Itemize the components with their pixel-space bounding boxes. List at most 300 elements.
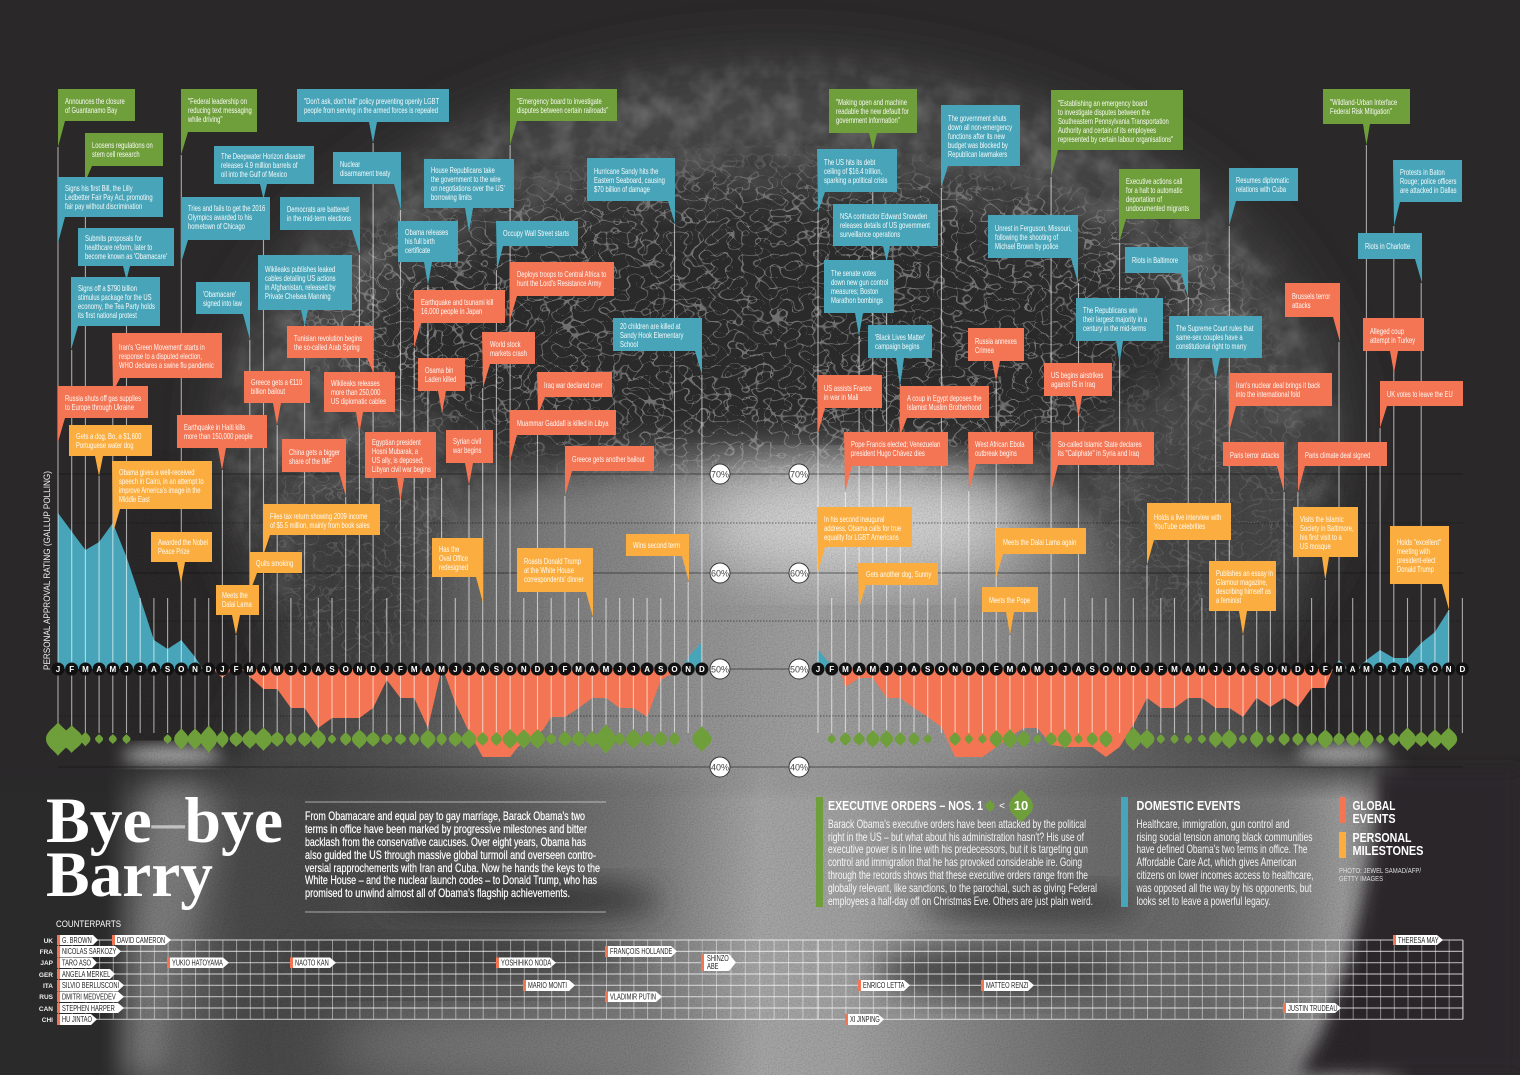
callout: Ferguson [988,215,1078,283]
leader tags: G. BROWN [62,937,92,945]
callout: mid-term elections: Democrats are battered [287,204,349,214]
callout: stock markets [482,332,535,388]
leader tags: SILVIO BERLUSCONI [62,982,119,990]
callout: Brexit [1380,381,1463,428]
callout: Iran deal: into the international fold [1236,389,1300,399]
callout: Bo the dog [69,425,152,476]
callout: don't ask don't tell: people from serving in the armed forces is repealed [304,105,438,115]
callout: government shutdown: down all non-emergency [948,122,1012,132]
callout: Emergency board railroads [510,89,617,145]
intro text: versial rapprochements with Iran and Cuba. Now he hands the keys to the [305,861,600,875]
callout: same-sex marriage: constitutional right to marry [1176,341,1247,351]
callout: stem-cell [85,133,163,182]
callout: mid-term elections: in the mid-term elections [287,213,351,223]
callout: Cairo speech: speech in Cairo, in an attempt to [119,476,204,486]
callout: Japan tsunami [414,290,505,348]
callout: Wildland: "Wildland-Urban Interface [1330,97,1397,107]
callout: debt ceiling [817,149,897,212]
callout: Pope Francis: Pope Francis elected; Venezuelan [851,439,940,449]
callouts: second term [817,89,1463,635]
callout: Guantanamo [58,89,135,147]
photo credit [1339,868,1421,883]
callout: Occupy Wall Street: Occupy Wall Street starts [503,228,569,238]
callout: Greece bailout: Greece gets a €110 [251,377,302,387]
month markers [56,665,1466,674]
callout: debt ceiling: The US hits its debt [824,157,875,167]
callout: birth certificate [398,221,458,285]
callout: Osama bin Laden: Osama bin [425,365,453,375]
country labels: CHI [42,1017,53,1024]
callout: Wikileaks logs: Wikileaks publishes leaked [265,264,335,274]
callout: Glamour essay: a feminist [1216,595,1241,605]
panel: domestic events: looks set to leave a powerful legacy. [1136,894,1270,908]
callout: Haiti earthquake: more than 150,000 people [184,431,253,441]
panel: executive orders: through the records shows that these executive orders range from the [828,868,1088,882]
callout: Osama bin Laden: Laden killed [425,374,456,384]
callout: Obamacare signed [196,282,250,340]
callout: Cuba: Resumes diplomatic [1236,175,1289,185]
panel: domestic events: have defined Obama's two terms in office. The [1136,842,1308,856]
callout: Republican majority: century in the mid-terms [1083,323,1146,333]
callout: nuclear treaty [333,152,401,210]
callout: debt ceiling: sparking a political crisis [824,175,888,185]
callout: Wikileaks logs: Private Chelsea Manning [265,291,331,301]
callout: Oval Office [432,538,483,603]
callout: Ferguson: Unrest in Ferguson, Missouri, [995,223,1072,233]
leader tags: ABE [707,963,719,971]
callout: Green Movement [112,333,222,392]
callout: Wildland [1323,89,1410,145]
callout: Cairo speech: Obama gives a well-received [119,467,194,477]
callout: Guantanamo: of Guantanamo Bay [65,105,118,115]
percentage scale badges: 40% [790,762,808,772]
callout: executive actions: Executive actions call [1126,176,1182,186]
callout: Charlotte: Riots in Charlotte [1365,241,1410,251]
callout: Glamour essay: describing himself as [1216,586,1271,596]
callout: Republican majority: The Republicans win [1083,305,1138,315]
callout: China IMF: China gets a bigger [289,447,340,457]
callout: mosque visit: US mosque [1300,541,1331,551]
callout: emergency board SEPTA: represented by certain labour organisations" [1058,134,1174,144]
legend: event colours: GLOBAL [1352,798,1396,813]
callout: Mubarak deposed: US ally, is deposed; [372,455,424,465]
callout: gun control: Marathon bombings [831,295,883,305]
panel: domestic events: Healthcare, immigration, gun control and [1136,817,1290,831]
executive orders diamonds [46,722,1457,756]
leader tags: XI JINPING [850,1016,880,1024]
callout: nuclear treaty: disarmament treaty [340,168,391,178]
callout: Greece second bailout: Greece gets another bailout [572,454,645,464]
callout: Gaddafi [510,410,616,461]
intro text: terms in office have been marked by progressive milestones and bitter [305,822,587,836]
callout: Ferguson: following the shooting of [995,232,1059,242]
callout: Oval Office: Has the [439,544,459,554]
leader tags: NICOLAS SARKOZY [62,948,117,956]
panel: domestic events: rising social tension among black communities [1136,830,1312,844]
callout: inaugural: address, Obama calls for true [824,523,901,533]
callout: Obamacare signed: signed into law [203,298,243,308]
callout: inaugural: equality for LGBT Americans [824,532,899,542]
callout: Wikileaks logs: in Afghanistan, released by [265,282,336,292]
callout: Baltimore [1125,247,1188,297]
callout: House Republicans: on negotiations over the US' [431,183,505,193]
country labels: GER [39,972,53,979]
callout: Mali [817,375,882,433]
intro text: promised to unwind almost all of Obama's flagship achievements. [305,886,570,900]
callout: emergency board SEPTA [1051,90,1183,177]
callout: Hurricane Sandy [587,158,675,224]
country labels [39,938,54,1024]
callout: Deepwater Horizon: releases 4.9 million barrels of [221,160,298,170]
callout: roasts Trump: correspondents' dinner [524,574,584,584]
intro text: backlash from the conservative caucuses. Over eight years, Obama has [305,835,586,849]
callout: Black Lives Matter: 'Black Lives Matter' [875,332,925,342]
title [46,785,283,911]
callout: Dalai Lama: Meets the [222,590,248,600]
callout: Glamour essay: Glamour magazine, [1216,577,1267,587]
callout: second term: Wins second term [633,540,680,550]
intro text: White House – and the nuclear launch codes – to Donald Trump, who has [305,873,597,887]
callout: Brussels [1285,283,1340,342]
callout: Bo the dog: Gets a dog, Bo, a $1,600 [76,431,141,441]
percentage guide lines [58,474,1463,767]
leader tags [57,935,1443,1025]
callout: debt ceiling: ceiling of $16.4 trillion, [824,166,882,176]
callout: Charlotte [1358,233,1422,283]
callout: Ferguson: Michael Brown by police [995,241,1058,251]
callout: roasts Trump: at the White House [524,565,574,575]
callout: Syrian war: Syrian civil [453,436,481,446]
callout: 2016 Olympics [181,197,270,263]
callout: IS airstrikes [1044,363,1112,417]
callout: Green Movement: response to a disputed election, [119,351,202,361]
callout: Snowden: NSA contractor Edward Snowden [840,211,927,221]
callout: executive actions [1119,169,1200,243]
callout: Crimea: Russia annexes [975,336,1017,346]
callout: inaugural [817,507,912,572]
callout: Deploys troops: Deploys troops to Central Africa to [517,269,606,279]
callout: House Republicans [424,159,514,232]
callout: Japan tsunami: Earthquake and tsunami kill [421,297,493,307]
panel: executive orders: 10 [1014,798,1028,813]
callout: stem-cell: stem cell research [92,149,140,159]
callout: Haiti earthquake: Earthquake in Haiti kills [184,422,245,432]
leader tags: DMITRI MEDVEDEV [62,994,116,1002]
callout: emergency board SEPTA: "Establishing an emergency board [1058,98,1147,108]
callout: Republican majority [1076,298,1163,363]
callout: Caliphate: its "Caliphate" in Syria and Iraq [1058,448,1139,458]
callout: Oval Office: redesigned [439,562,468,572]
title: Barry [46,839,213,911]
callout: Pope Francis: president Hugo Chávez dies [851,448,925,458]
callout: government shutdown: functions after its new [948,131,1005,141]
intro text: also guided the US through massive global turmoil and overseen contro- [305,848,596,862]
percentage scale badges: 70% [790,470,808,480]
callout: Pope: Meets the Pope [989,595,1030,605]
callout: Mali: in war in Mali [824,392,859,402]
callout: Republican majority: their largest majority in a [1083,314,1148,324]
callout: Greece bailout [244,371,310,425]
callout: Trump meeting [1390,526,1449,610]
callout: Wildland: Federal Risk Mitigation" [1330,106,1392,116]
callout: Mubarak deposed: Hosni Mubarak, a [372,446,419,456]
percentage scale badges: 50% [790,664,808,674]
callout: Nobel prize: Peace Prize [158,546,190,556]
callout: Wikileaks cables: US diplomatic cables [331,396,386,406]
panel: domestic events: Affordable Care Act, which gives American [1136,855,1296,869]
callout: same-sex marriage: The Supreme Court rules that [1176,323,1253,333]
panel: domestic events: was opposed all the way by his opponents, but [1136,881,1312,895]
callout: 20 children: School [620,339,638,349]
leader tags: MATTEO RENZI [986,982,1028,990]
leader tags: JUSTIN TRUDEAU [1288,1005,1337,1013]
callout: don't ask don't tell: "Don't ask, don't tell" policy preventing openly LGBT [304,96,439,106]
callout: 2016 Olympics: hometown of Chicago [188,221,245,231]
callout: Egypt coup [900,386,989,436]
callout: Dalai Lama [216,585,259,635]
callout: Mali: US assists France [824,383,872,393]
callout: same-sex marriage: same-sex couples have a [1176,332,1243,342]
panel: domestic events: citizens on lower incomes access to healthcare, [1136,868,1314,882]
panel: executive orders [816,789,1097,908]
callout: Tunisian revolution [287,326,373,372]
callout: gun control: measures; Boston [831,286,878,296]
callout: Black Lives Matter [868,325,932,386]
percentage scale badges [710,464,809,777]
callout: Nobel prize [151,532,212,583]
panel: executive orders: EXECUTIVE ORDERS – NOS. 1 [828,798,983,813]
callout: executive actions: deportation of [1126,194,1163,204]
callout: inaugural: In his second inaugural [824,514,884,524]
callout: birth certificate: his full birth [405,236,435,246]
callout: Wikileaks logs: cables detailing US actions [265,273,336,283]
callout: Turkey coup [1363,318,1424,373]
callout: Sunny dog [858,563,938,608]
callout: Cuba: relations with Cuba [1236,184,1287,194]
callout: YouTube: Holds a live interview with [1154,512,1221,522]
callout: Brussels: attacks [1292,300,1311,310]
callout: mosque visit: Society in Baltimore, [1300,523,1354,533]
callout: Caliphate [1051,432,1154,492]
legend: event colours: EVENTS [1352,811,1396,826]
callout: IS airstrikes: US begins airstrikes [1051,370,1103,380]
callout: gun control: down new gun control [831,277,889,287]
callout: Turkey coup: attempt in Turkey [1370,335,1415,345]
callout: Osama bin Laden [418,358,465,413]
y-axis label: PERSONAL APPROVAL RATING (GALLUP POLLING) [42,471,53,670]
photo credit: GETTY IMAGES [1339,876,1383,883]
callout: Hurricane Sandy: Hurricane Sandy hits the [594,166,658,176]
leader tags: YOSHIHIKO NODA [501,960,552,968]
callout: Caliphate: So-called Islamic State declares [1058,439,1142,449]
callout: Hurricane Sandy: $70 billion of damage [594,184,650,194]
callout: Greece bailout: billion bailout [251,386,285,396]
callout: Russia gas: to Europe through Ukraine [65,402,134,412]
country labels: RUS [39,994,54,1001]
legend: event colours [1339,797,1424,858]
month markers: JFMAMJJASONDJFMAMJJASONDJFMAMJJASONDJFMAMJJASOND [56,665,705,674]
callout: Baton Rouge [1393,160,1462,226]
callout: Deploys troops [510,262,614,320]
callout: roasts Trump: Roasts Donald Trump [524,556,581,566]
panel: executive orders: right in the US – but what about his administration hasn't? His use of [828,830,1084,844]
callouts: first term [58,89,702,635]
callout: Obamacare proposals: become known as 'Obamacare' [85,251,167,261]
monthly timeline stems [58,143,1462,733]
callout: Paris climate [1298,442,1387,492]
callout: mid-term elections [280,197,360,255]
callout: Trump meeting: president-elect [1397,555,1436,565]
intro text [305,802,606,912]
callout: Russia gas: Russia shuts off gas supplies [65,393,141,403]
callout: Deepwater Horizon: oil into the Gulf of Mexico [221,169,287,179]
callout: Snowden: releases details of US government [840,220,930,230]
callout: stimulus: economy, the Tea Party holds [78,301,155,311]
panel: domestic events [1121,797,1314,908]
leader tags: SHINZO [707,955,729,963]
callout: Japan tsunami: 16,000 people in Japan [421,306,482,316]
approval area chart [58,513,1449,757]
callout: open data: government information" [836,115,900,125]
callout: government shutdown: The government shuts [948,113,1007,123]
leader tags: TARO ASO [62,960,91,968]
callout: 2016 Olympics: Olympics awarded to his [188,212,252,222]
callout: Hurricane Sandy: Eastern Seaboard, causing [594,175,665,185]
callout: stimulus: Signs off a $790 billion [78,283,137,293]
callout: Crimea [968,328,1024,381]
callout: quits smoking: Quits smoking [256,558,293,568]
callout: YouTube: YouTube celebrities [1154,521,1206,531]
country labels: ITA [43,983,53,990]
callout: second term [626,534,689,582]
photo credit: PHOTO: JEWEL SAMAD/AFP/ [1339,868,1421,875]
percentage scale badges: 60% [790,568,808,578]
callout: Crimea: Crimea [975,345,995,355]
leader tags: FRANÇOIS HOLLANDE [610,948,673,956]
callout: Paris attacks [1223,442,1284,492]
callout: federal leadership: "Federal leadership on [188,96,247,106]
callout: stimulus: stimulus package for the US [78,292,152,302]
callout: Turkey coup: Alleged coup [1370,326,1404,336]
callout: Lilly Ledbetter: fair pay without discrimination [65,201,142,211]
leader tags: YUKIO HATOYAMA [172,960,223,968]
callout: Dalai Lama: Dalai Lama [222,599,253,609]
callout: Dalai Lama again [996,528,1086,578]
percentage scale badges: 50% [711,664,729,674]
callout: Baton Rouge: Protests in Baton [1400,167,1445,177]
callout: Guantanamo: Announces the closure [65,96,125,106]
callout: birth certificate: certificate [405,245,430,255]
callout: Paris attacks: Paris terror attacks [1230,450,1280,460]
callout: Dalai Lama again: Meets the Dalai Lama again [1003,537,1076,547]
callout: government shutdown [941,105,1020,188]
callout: stock markets: markets crash [490,348,527,358]
callout: gun control: The senate votes [831,268,876,278]
callout: Snowden: surveillance operations [840,229,900,239]
callout: Iran deal [1229,373,1332,432]
callout: mosque visit: Visits the Islamic [1300,514,1344,524]
callout: 20 children [613,318,702,375]
leader tags: THERESA MAY [1398,937,1439,945]
panel: executive orders: employees a half-day off on Christmas Eve. Others are just plain weird. [828,894,1093,908]
panel: executive orders: globally relevant, like sanctions, to the parochial, such as giving Federal [828,881,1097,895]
callout: Nobel prize: Awarded the Nobel [158,537,208,547]
callout: Haiti earthquake [177,415,267,470]
callout: stimulus [71,277,160,350]
callout: Deploys troops: hunt the Lord's Resistance Army [517,278,602,288]
callout: quits smoking [250,552,302,592]
callout: tax return: Files tax return showing 2009 income [270,511,367,521]
callout: Wikileaks cables [324,372,395,433]
leader tags: ENRICO LETTA [863,982,905,990]
callout: Snowden [833,204,938,262]
callout: federal leadership: reducing text messaging [188,105,252,115]
callout: mosque visit [1293,507,1358,580]
callout: Trump meeting: Donald Trump [1397,564,1434,574]
country labels: JAP [40,960,54,967]
callout: IS airstrikes: against IS in Iraq [1051,379,1095,389]
callout: birth certificate: Obama releases [405,227,448,237]
callout: executive actions: for a halt to automatic [1126,185,1183,195]
title: Bye–bye [46,785,283,857]
percentage scale badges: 40% [711,762,729,772]
callout: Bo the dog: Portuguese water dog [76,440,134,450]
callout: Glamour essay: Publishes an essay in [1216,568,1273,578]
callout: Iraq war [537,372,612,415]
legend: event colours: MILESTONES [1352,843,1424,858]
callout: Obamacare signed: 'Obamacare' [203,289,236,299]
callout: executive actions: undocumented migrants [1126,203,1189,213]
callout: Lilly Ledbetter: Signs his first Bill, the Lilly [65,183,133,193]
callout: Brussels: Brussels terror [1292,291,1330,301]
callout: House Republicans: the government to the wire [431,174,501,184]
callout: Cairo speech: improve America's image in the [119,485,201,495]
callout: emergency board SEPTA: to investigate disputes between the [1058,107,1150,117]
callout: Obamacare proposals: Submits proposals for [85,233,142,243]
callout: Pope Francis [844,432,948,492]
callout: Emergency board railroads: "Emergency board to investigate [517,96,602,106]
callout: Lilly Ledbetter: Ledbetter Fair Pay Act, promoting [65,192,153,202]
panel: executive orders: Barack Obama's executive orders have been attacked by the political [828,817,1086,831]
callout: Baton Rouge: Rouge; police officers [1400,176,1457,186]
callout: Syrian war: war begins [452,445,482,455]
callout: Egypt coup: A coup in Egypt deposes the [907,393,982,403]
intro text: From Obamacare and equal pay to gay marriage, Barack Obama's two [305,809,585,823]
callout: stem-cell: Loosens regulations on [92,140,153,150]
leader tags: ANGELA MERKEL [62,971,110,979]
callout: Egypt coup: Islamist Muslim Brotherhood [907,402,981,412]
callout: 20 children: Sandy Hook Elementary [620,330,684,340]
callout: Mubarak deposed: Egyptian president [372,437,421,447]
callout: Glamour essay [1209,561,1276,635]
callout: government shutdown: budget was blocked by [948,140,1008,150]
callout: emergency board SEPTA: Authority and certain of its employees [1058,125,1156,135]
percentage scale badges: 60% [711,568,729,578]
callout: don't ask don't tell [297,89,449,143]
callout: roasts Trump [517,548,593,617]
callout: federal leadership [181,89,257,155]
callout: open data: readable the new default for [836,106,909,116]
callout: Tunisian revolution: Tunisian revolution begins [294,333,362,343]
callout: mosque visit: his first visit to a [1300,532,1343,542]
callout: nuclear treaty: Nuclear [340,159,360,169]
callout: Baltimore: Riots in Baltimore [1132,255,1178,265]
callout: Emergency board railroads: disputes between certain railroads" [517,105,609,115]
callout: Gaddafi: Muammar Gaddafi is killed in Libya [517,418,609,428]
callout: Paris climate: Paris climate deal signed [1305,450,1370,460]
callout: Ebola: West African Ebola [975,439,1025,449]
callout: tax return: of $5.5 million, mainly from book sales [270,520,370,530]
